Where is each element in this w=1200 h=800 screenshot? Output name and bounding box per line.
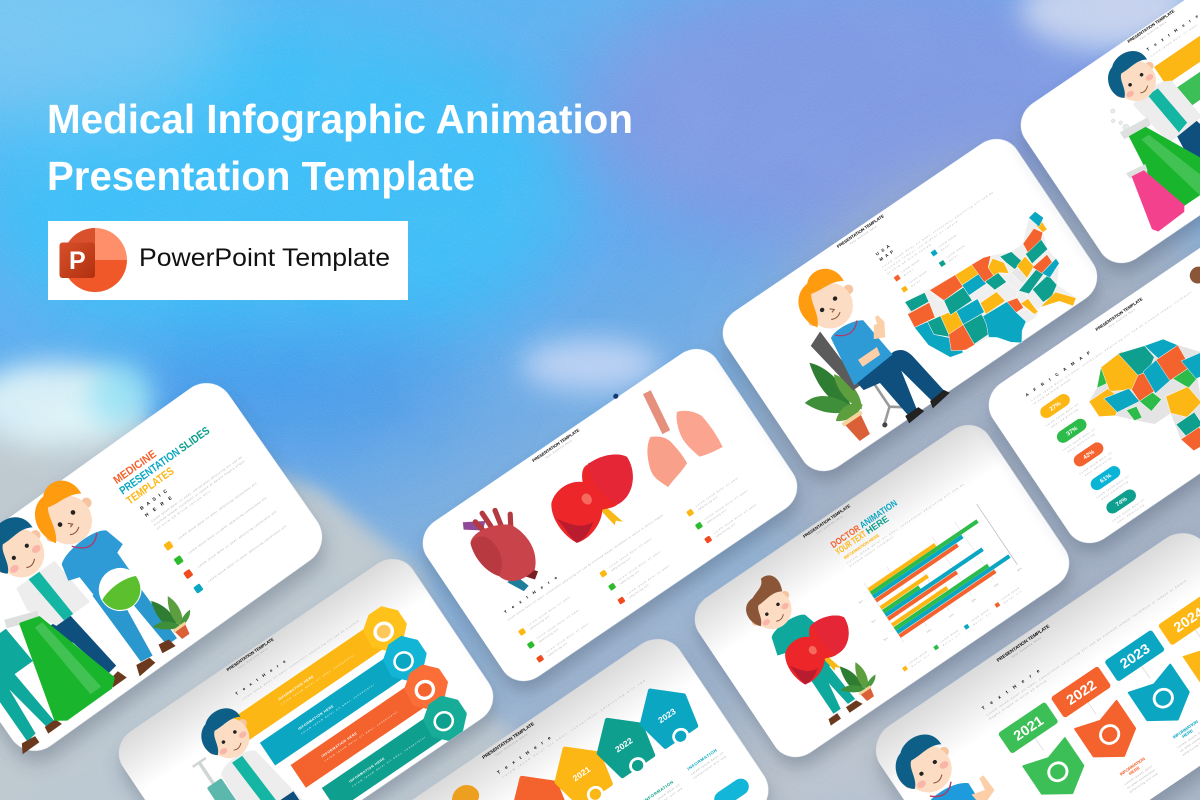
bar chart: Text: [857, 599, 864, 605]
panel: organs slide: [411, 336, 807, 691]
bar chart: 20%: [948, 612, 955, 619]
green flask: [0, 587, 117, 725]
checklist column 1: Lorem ipsum dolor sit amet: [527, 595, 571, 627]
panel: year timeline slide: [865, 522, 1200, 800]
stat pill 27%: 27%: [1049, 401, 1063, 413]
shield icon 2022: [1067, 689, 1144, 770]
panel: bar chart slide: [685, 415, 1079, 767]
map legend: Lorem ipsum: [937, 233, 957, 248]
teal bar with hex icon: [256, 632, 431, 768]
checklist column 3: [685, 476, 760, 544]
orange bar with hex icon: Lorem ipsum dolor sit amet, consectetur: [324, 710, 398, 762]
stat pill 74%: Lorem ipsum dolor sit: [1111, 498, 1145, 523]
heading: medicine presentation slides templates: [111, 415, 219, 507]
icon: plant: [829, 652, 885, 710]
slide title: PRESENTATION TEMPLATE: [1126, 8, 1176, 44]
stat pill 42%: Lorem ipsum dolor sit: [1078, 451, 1113, 476]
year box 2022: 2022: [1064, 677, 1100, 709]
pentagon 2021: 2021: [571, 764, 592, 783]
icon: plant: [140, 585, 201, 649]
slide title: PRESENTATION TEMPLATE: [802, 503, 851, 539]
checklist: Lorem ipsum dolor sit amet, adipiscing consectetur elit: [187, 496, 268, 555]
doctor with teal scrubs, cropped: [0, 627, 73, 754]
slide title: PRESENTATION TEMPLATE: [836, 213, 885, 249]
checklist column 3: Lorem ipsum dolor sit amet: [704, 489, 748, 521]
chart legend: dolor sit: [1003, 589, 1023, 604]
pentagon 2023: 2023: [656, 706, 678, 725]
doctor head fragment: [1186, 263, 1200, 287]
text block: Africa map: A F R I C A M A P: [1025, 350, 1091, 398]
chart legend: Lorem ipsum: [908, 650, 928, 665]
text block: T e x t H e r e: [496, 735, 552, 775]
yellow bar with hex icon: Lorem ipsum dolor sit amet, consectetur: [280, 653, 355, 706]
checklist column 1: adipiscing elit: [547, 641, 568, 657]
stat pill 27%: Lorem ipsum dolor sit: [1045, 402, 1079, 427]
stat pill 61%: [1087, 461, 1132, 503]
chart legend: dolor sit: [942, 632, 961, 647]
checklist column 2: Lorem ipsum dolor sit amet: [617, 550, 661, 582]
info: 2023 column: INFORMATION: [686, 748, 718, 771]
text block: T e x t H e r e: [981, 668, 1041, 712]
info: 2023 column: [686, 745, 727, 780]
badge label: PowerPoint Template: [139, 244, 390, 272]
stat pill 61%: 61%: [1099, 473, 1113, 485]
yellow bar with hex icon: [225, 602, 412, 746]
heading: doctor animation: eiusmod tempor incididunt: [848, 535, 894, 568]
text block: basic here: Ut enim ad minim veniam quis: [156, 489, 212, 531]
checklist column 3: adipiscing elit: [715, 522, 736, 538]
year box 2021: [998, 702, 1059, 754]
text block: basic here: Lorem ipsum dolor sit amet, consectetur adipiscing elit sed do: [150, 455, 243, 523]
checklist: Lorem ipsum dolor sit amet, adipiscing consectetur elit: [207, 524, 287, 583]
info: 2022: adipiscing elit sed: [1129, 772, 1159, 794]
slide title: PRESENTATION TEMPLATE: [481, 721, 535, 760]
map: Africa countries: [1076, 314, 1200, 486]
yellow information bar: [1154, 8, 1200, 85]
checklist column 2: [599, 537, 673, 605]
text block: Lorem ipsum dolor sit amet, consectetur adipiscing elit sed do eiusmod tempor incididunt ut labore et dolore magna: [506, 513, 664, 622]
slide title: PRESENTATION TEMPLATE: [531, 427, 580, 463]
plant: [788, 350, 880, 455]
map: USA states: [899, 210, 1094, 388]
stat pill 74%: 74%: [1115, 496, 1129, 508]
text block: Lorem ipsum dolor sit amet, consectetur adipiscing elit sed do eiusmod: [241, 619, 360, 701]
teal bar with hex icon: Lorem ipsum dolor sit amet, consectetur: [300, 683, 375, 735]
text block: USA map: M A P: [878, 249, 894, 262]
map legend: Lorem ipsum: [946, 244, 965, 259]
map legend: dolor: [948, 253, 959, 262]
info: 2022: INFORMATION: [1119, 756, 1146, 777]
slide title: PRESENTATION TEMPLATE: [226, 636, 275, 672]
text block: basic here: H E R E: [144, 495, 173, 518]
green bar with hex icon: Lorem ipsum dolor sit amet, consectetur: [351, 735, 426, 788]
year box 2023: [1104, 630, 1165, 682]
panel: bar list slide: [109, 549, 503, 800]
green information bar: [1174, 31, 1200, 109]
panel: medicine slide: [0, 369, 333, 762]
teal pill: [711, 775, 752, 800]
heading: medicine presentation slides templates: MEDICINE: [111, 448, 159, 487]
checklist column 3: adipiscing elit: [706, 508, 727, 524]
heading: doctor animation: ANIMATION: [858, 498, 899, 530]
bar chart: Text: [882, 636, 889, 642]
teal bar with hex icon: INFORMATION HERE: [297, 704, 335, 731]
map legend: dolor: [940, 243, 951, 252]
doctor hair fragment at slide edge: [452, 785, 479, 800]
chart: liver organ: [539, 443, 656, 553]
stat pill 37%: 37%: [1066, 425, 1080, 438]
icon: PowerPoint logo: P: [69, 247, 86, 275]
stat pill 42%: amet adipiscing: [1084, 456, 1112, 477]
bar chart: 30%: [970, 597, 978, 603]
heading: medicine presentation slides templates: PRESENTATION: [118, 446, 182, 497]
heading: medicine presentation slides templates: SLIDES: [177, 425, 213, 455]
subtitle line: Presentation Template: [47, 153, 475, 199]
chart legend: [900, 586, 1023, 673]
chart legend: Lorem ipsum: [970, 608, 989, 623]
doctor with blue hair pointing: [883, 716, 1048, 800]
chart legend: dolor sit: [910, 653, 930, 668]
stat pill 74%: amet adipiscing: [1116, 503, 1145, 524]
text block: Africa map: Ut enim ad minim veniam: [1033, 378, 1071, 405]
map legend: dolor: [910, 279, 921, 288]
slide title: Your Subtitle Here: [1107, 307, 1136, 328]
doctor with blue hair: [1098, 31, 1200, 207]
text block: basic here: B A S I C: [139, 488, 168, 511]
text block: Lorem ipsum dolor sit amet, consectetur adipiscing elit sed: [501, 679, 646, 779]
checklist column 1: adipiscing elit: [529, 614, 550, 630]
stat pill 42%: 42%: [1083, 449, 1096, 461]
checklist column 3: Lorem ipsum dolor sit amet: [713, 503, 757, 535]
slide title: Your Subtitle Here: [494, 732, 528, 757]
chart legend: Lorem ipsum: [939, 628, 959, 644]
orange bar with hex icon: [286, 660, 453, 791]
heading: doctor animation: DOCTOR: [829, 523, 862, 550]
doctor with blue hair: [187, 698, 310, 800]
pentagon 2022: 2022: [613, 735, 635, 754]
info: 2022 column: [643, 777, 683, 800]
shield icon 2021: [1014, 724, 1093, 800]
info: 2022: sit amet consectetur: [1126, 768, 1156, 790]
text block: T e x t H e r e: [234, 658, 287, 696]
text block: USA map: eiusmod tempor incididunt ut labore: [884, 219, 959, 272]
bar chart: [850, 503, 1023, 657]
year box 2021: 2021: [1011, 713, 1047, 744]
map legend: dolor: [903, 268, 914, 277]
orange pentagon: [501, 764, 578, 800]
map legend: Lorem ipsum: [908, 270, 927, 285]
info: 2023: HERE: [1181, 728, 1194, 739]
checklist column 2: Lorem ipsum dolor sit amet: [626, 564, 670, 596]
bubbles: [1106, 107, 1130, 135]
dark dot marker: [612, 393, 619, 400]
orange bar with hex icon: INFORMATION HERE: [321, 731, 358, 758]
chart legend: Lorem ipsum: [1000, 586, 1020, 601]
map legend: Lorem ipsum: [900, 259, 920, 274]
stat pill 42%: [1070, 438, 1115, 479]
syringe: [192, 756, 249, 800]
green bar with hex icon: [318, 692, 472, 800]
stat pill 27%: amet adipiscing: [1050, 407, 1079, 429]
checklist: Lorem ipsum dolor sit amet, adipiscing consectetur elit: [197, 510, 277, 569]
slide title: Your Subtitle Here: [1010, 636, 1042, 659]
chart: heart organ: [456, 497, 551, 603]
info: 2023: INFORMATION: [1172, 719, 1199, 740]
bar chart: 50%: [1016, 566, 1023, 572]
text block: magna aliqua ut enim ad minim: [988, 679, 1048, 721]
slide title: Your Subtitle Here: [849, 224, 878, 245]
pentagon 2021: [544, 735, 621, 800]
chart: lungs organ: [613, 373, 725, 490]
checklist column 1: Lorem ipsum dolor sit amet: [545, 622, 589, 654]
checklist column 1: adipiscing elit: [538, 627, 559, 643]
stat pill 74%: [1103, 485, 1148, 526]
heading: doctor animation: YOUR TEXT: [834, 529, 868, 557]
shield icon 2023: [1120, 652, 1198, 734]
slide title: Your Subtitle Here: [1139, 20, 1167, 41]
bar chart: 40%: [993, 581, 1000, 588]
heading: doctor animation: [829, 461, 967, 570]
checklist column 2: adipiscing elit: [628, 583, 650, 599]
shield icon 2024: [1174, 616, 1200, 698]
panel: pentagon timeline slide: [346, 628, 779, 800]
text block: Africa map: Lorem ipsum dolor sit amet, consectetur adipiscing elit sed do eiusmod tempor incididunt: [1030, 290, 1192, 402]
stat pill 61%: Lorem ipsum dolor sit: [1095, 474, 1130, 499]
checklist column 3: Lorem ipsum dolor sit amet: [695, 476, 739, 508]
info: 2022: Lorem ipsum dolor: [1123, 764, 1153, 786]
heading: medicine presentation slides templates: TEMPLATES: [125, 465, 177, 507]
text block: [1146, 0, 1200, 58]
checklist column 1: Lorem ipsum dolor sit amet: [535, 608, 580, 640]
stat pill 37%: [1053, 414, 1098, 455]
yellow bar with hex icon: INFORMATION HERE: [277, 674, 315, 701]
text block: basic here: eiusmod tempor incididunt ut labore et dolore magna aliqua: [153, 459, 246, 527]
bar chart: Text: [870, 618, 877, 624]
info: 2022: [1117, 755, 1159, 794]
chart legend: dolor sit: [972, 611, 992, 626]
map legend: [892, 233, 967, 293]
slide title: PRESENTATION TEMPLATE: [1094, 296, 1144, 332]
seated doctor with chair: [778, 247, 952, 446]
stat pill 27%: [1036, 389, 1082, 431]
year box 2023: 2023: [1117, 641, 1153, 672]
heading: doctor animation: HERE: [864, 514, 890, 536]
panel: flask doctor slide: [1011, 0, 1200, 273]
text block: USA map: Ut enim ad minim veniam: [886, 243, 932, 275]
checklist column 3: adipiscing elit: [697, 495, 718, 511]
title: Medical Infographic Animation: [47, 96, 633, 142]
year box 2024: [1158, 593, 1200, 646]
doctor with orange hair holding flask: [17, 470, 190, 679]
slide title: PRESENTATION TEMPLATE: [996, 624, 1051, 664]
heading: doctor animation: Lorem ipsum dolor sit amet, consectetur adipiscing elit sed do: [846, 482, 965, 564]
green flask: [1115, 94, 1200, 216]
doctor with blue hair: [0, 506, 137, 704]
info: 2023 column: consectetur elit sed: [693, 754, 727, 780]
text block: USA map: Lorem ipsum dolor sit amet, consectetur adipiscing elit sed do: [881, 190, 994, 269]
pentagon 2023: [630, 677, 706, 757]
stat pill 37%: amet adipiscing: [1067, 432, 1096, 453]
green bar with hex icon: INFORMATION HERE: [348, 756, 386, 784]
badge: PowerPoint Template: [48, 221, 408, 300]
checklist column 2: Lorem ipsum dolor sit amet: [608, 537, 652, 569]
stat pill 37%: Lorem ipsum dolor sit: [1062, 427, 1096, 452]
checklist column 2: adipiscing elit: [610, 556, 632, 572]
pentagon 2022: [586, 706, 663, 786]
text block: USA map: U S A: [875, 244, 891, 257]
heading: doctor animation: INFORMATION HERE: [843, 533, 880, 560]
icon: PowerPoint logo: [60, 228, 127, 292]
slide title: Your Subtitle Here: [237, 646, 269, 670]
text block: T e x t H e r e: [1146, 13, 1200, 52]
doctor holding liver: [734, 552, 890, 730]
checklist: Lorem ipsum dolor sit amet, adipiscing consectetur elit: [177, 481, 257, 540]
panel: USA map slide: [713, 129, 1110, 485]
checklist: [163, 480, 288, 594]
checklist column 1: [517, 595, 591, 664]
info: 2022: HERE: [1128, 765, 1141, 776]
year box 2022: [1051, 666, 1112, 718]
info: 2023: [1170, 718, 1200, 757]
panel: Africa map slide: [979, 201, 1200, 553]
pink flask: [1119, 156, 1187, 233]
checklist column 2: adipiscing elit: [619, 569, 640, 585]
slide title: Your Subtitle Here: [544, 438, 573, 460]
bar chart: 10%: [925, 627, 933, 634]
text block: basic here: [139, 441, 248, 532]
stat pill 61%: amet adipiscing: [1101, 479, 1129, 501]
slide title: Your Subtitle Here: [815, 514, 844, 535]
info: 2023 column: Lorem ipsum dolor sit: [690, 751, 724, 776]
text block: Lorem ipsum dolor sit amet, consectetur adipiscing elit sed do eiusmod tempor incididunt ut labore et dolore: [986, 579, 1187, 717]
text block: T e x t H e r e: [503, 575, 559, 615]
